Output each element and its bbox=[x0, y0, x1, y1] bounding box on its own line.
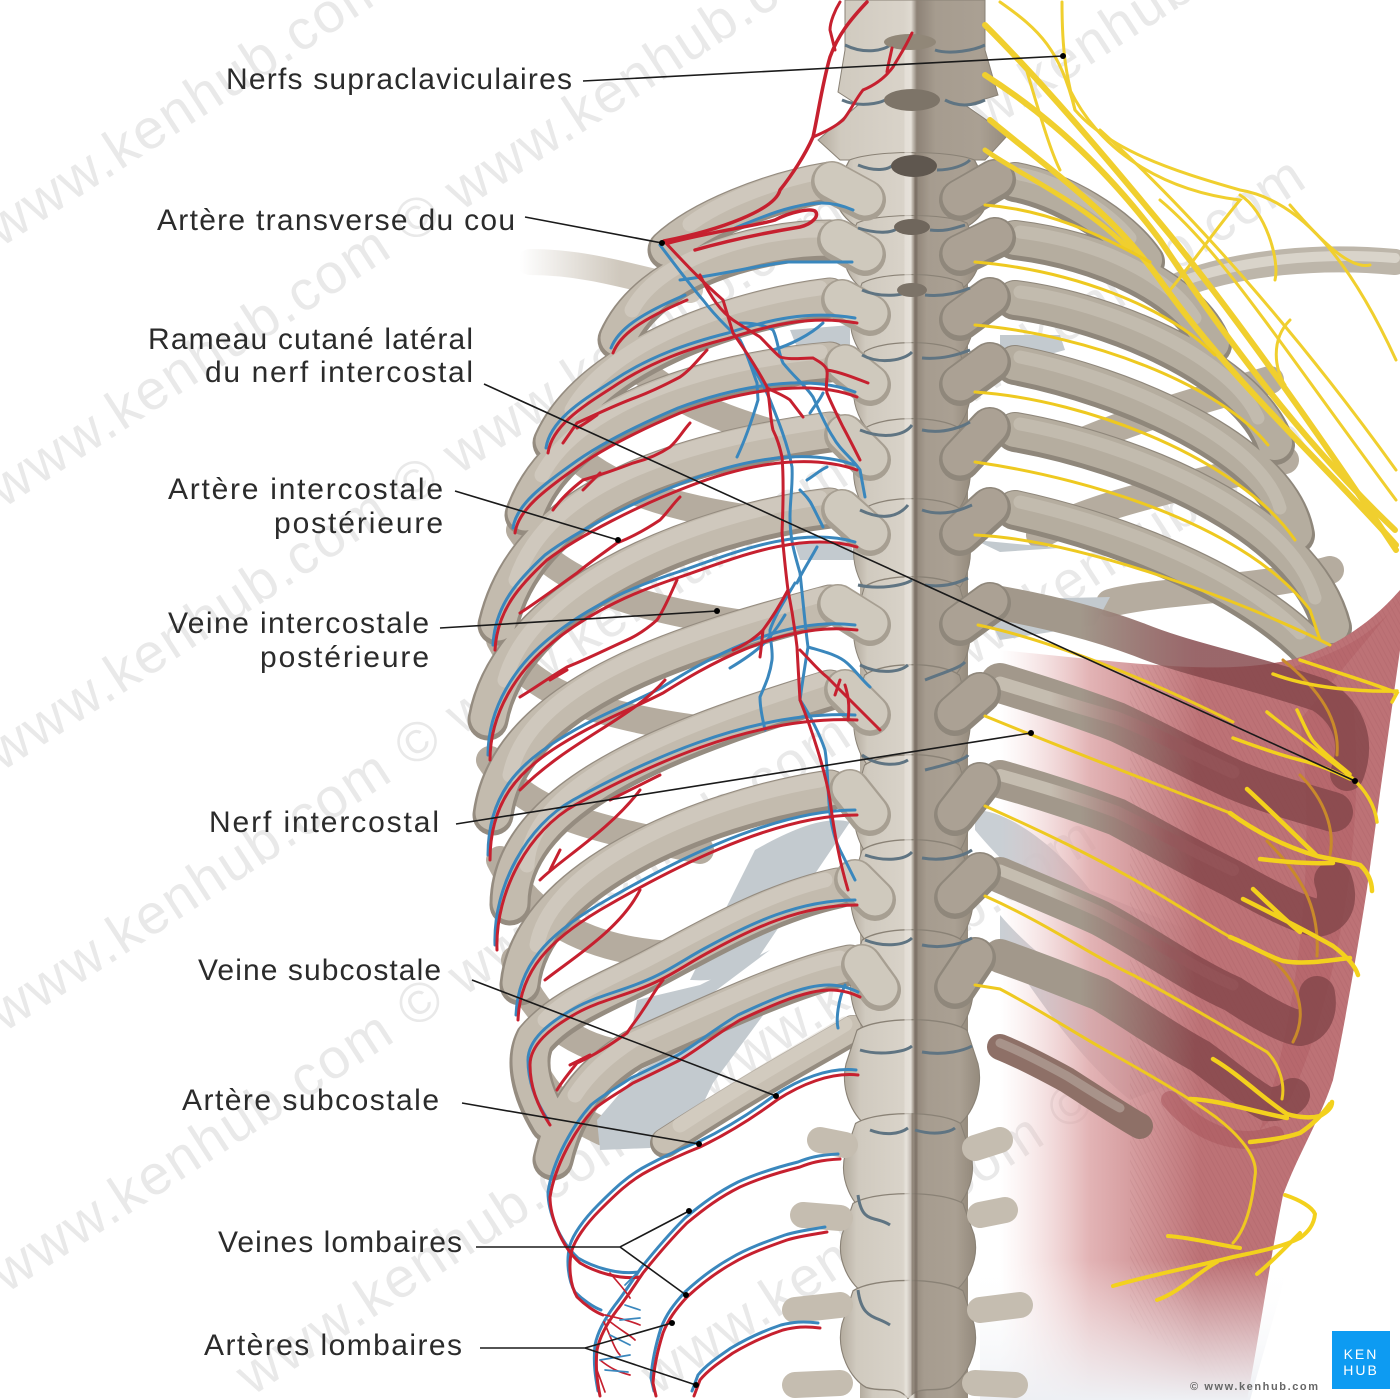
background watermark: www.kenhub.com © www.kenhub.com bbox=[223, 802, 1107, 1400]
leader: Rameau cutané latéral bbox=[484, 384, 1358, 784]
spine: transverse processes and rib heads bbox=[795, 178, 1020, 1385]
leader: Veine subcostale bbox=[472, 980, 779, 1099]
spine: vertebral column bbox=[795, 0, 1020, 1398]
costal cartilage bbox=[597, 325, 1200, 1150]
label: Veine intercostale postérieure bbox=[168, 607, 429, 674]
label: Rameau cutané latéral du nerf intercostal: du nerf intercostal bbox=[205, 356, 473, 389]
anterior rib segments seen through the gaps bbox=[490, 350, 1330, 1135]
leader: Nerf intercostal bbox=[456, 730, 1034, 824]
leader: Nerfs supraclaviculaires bbox=[583, 53, 1066, 81]
label: Veines lombaires: Veines lombaires bbox=[218, 1226, 462, 1259]
blue veins: paired with ribs bbox=[488, 295, 858, 1391]
background watermark: www.kenhub.com © www.kenhub.com © www.kenhub.com bbox=[0, 142, 1317, 1043]
leader: Artère intercostale postérieure bbox=[455, 491, 621, 543]
background watermark: www.kenhub.com © bbox=[628, 1066, 1106, 1400]
label: Artère intercostale postérieure: Artère intercostale bbox=[168, 473, 443, 506]
red arteries: trunks and collaterals bbox=[520, 2, 912, 1090]
clavicle and scapular bone behind ribs bbox=[530, 256, 1395, 290]
leader: Artère subcostale bbox=[462, 1103, 702, 1147]
muscle: latissimus dorsi bbox=[980, 590, 1400, 1400]
yellow nerves: right intercostal nerves bbox=[975, 205, 1337, 1243]
label: Nerfs supraclaviculaires: Nerfs supraclaviculaires bbox=[226, 63, 572, 96]
lumbar end branches bbox=[597, 1270, 640, 1392]
red arteries: paired with ribs bbox=[490, 300, 860, 1396]
yellow nerves: brachial and supraclavicular branches bbox=[985, 2, 1396, 550]
ribs: left side bbox=[488, 172, 853, 1160]
label: Veine intercostale postérieure: Veine intercostale bbox=[168, 607, 429, 640]
leader lines bbox=[440, 53, 1358, 1388]
leader: Veine intercostale postérieure bbox=[440, 608, 720, 628]
label: Rameau cutané latéral du nerf intercostal bbox=[148, 323, 473, 389]
label: Artère subcostale: Artère subcostale bbox=[182, 1084, 439, 1117]
blue veins: trunks bbox=[660, 203, 870, 1028]
label: Artère transverse du cou: Artère transverse du cou bbox=[157, 204, 515, 237]
leader: Artère transverse du cou bbox=[525, 217, 665, 246]
label: Nerf intercostal: Nerf intercostal bbox=[209, 806, 439, 839]
background watermark: www.kenhub.com © www.kenhub.com © www.kenhub.com bbox=[0, 403, 1319, 1304]
copyright text: © www.kenhub.com bbox=[1190, 1381, 1318, 1393]
labels bbox=[148, 63, 572, 1362]
ribs: right side upper bbox=[1015, 174, 1332, 660]
leader: Veines lombaires bbox=[476, 1208, 692, 1298]
Kenhub logo: KEN bbox=[1344, 1346, 1378, 1362]
Kenhub logo bbox=[1332, 1331, 1390, 1389]
leader: Artères lombaires bbox=[480, 1320, 699, 1388]
spine: spinous processes bbox=[842, 34, 985, 1398]
label: Rameau cutané latéral du nerf intercostal: Rameau cutané latéral bbox=[148, 323, 473, 356]
label: Artères lombaires: Artères lombaires bbox=[204, 1329, 462, 1362]
muscle: ribs seen through muscle bbox=[1000, 603, 1352, 1140]
Kenhub logo: HUB bbox=[1343, 1362, 1379, 1378]
label: Veine subcostale: Veine subcostale bbox=[198, 954, 441, 987]
label: Artère intercostale postérieure bbox=[168, 473, 443, 540]
label: Veine intercostale postérieure: postérieure bbox=[260, 641, 429, 674]
yellow nerves: cutaneous branches over muscle bbox=[1113, 660, 1397, 1300]
label: Artère intercostale postérieure: postérieure bbox=[274, 507, 443, 540]
